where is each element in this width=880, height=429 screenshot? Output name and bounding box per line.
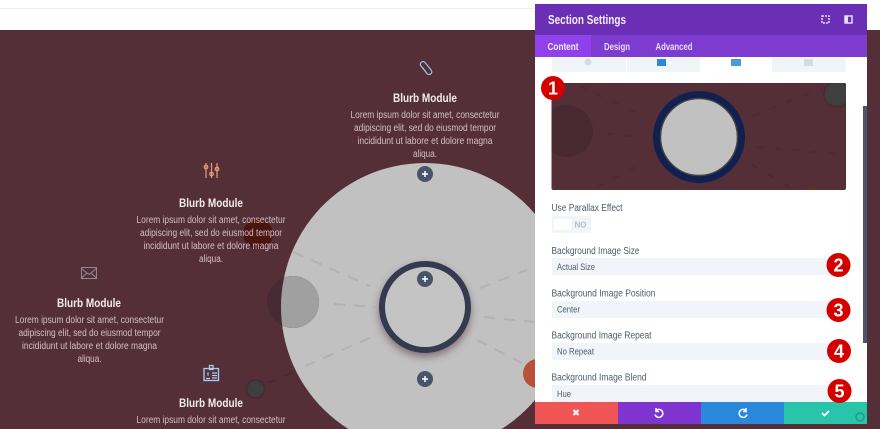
body text: aliqua. (199, 254, 223, 265)
header bar: Section Settings (548, 13, 626, 27)
option: image position (552, 288, 846, 318)
blurb: lower left (136, 366, 286, 426)
body text: adipiscing elit, sed do eiusmod tempor (140, 228, 283, 239)
badge 3: 3 (833, 300, 844, 320)
decorative dot: dark red (243, 219, 273, 249)
option: image size (552, 246, 846, 275)
option: parallax: Use Parallax Effect (552, 203, 623, 214)
body text (136, 215, 286, 265)
body text: incididunt ut labore et dolore magna (144, 241, 279, 252)
tab icon row (552, 57, 846, 72)
option: image size: Actual Size (557, 261, 595, 272)
body text: Lorem ipsum dolor sit amet, consectetur (350, 110, 500, 121)
heading: Blurb Module (179, 196, 243, 210)
badge 5: 5 (834, 382, 845, 402)
icon: envelope (82, 268, 96, 278)
option: image repeat: Background Image Repeat (552, 330, 652, 342)
tab bar: Content (548, 42, 579, 53)
tab bar (535, 35, 867, 57)
heading: Blurb Module (393, 91, 457, 105)
body text: Lorem ipsum dolor sit amet, consectetur (15, 315, 165, 326)
icon: sliders (204, 163, 219, 178)
tab bar: Design (604, 42, 630, 53)
action bar (535, 402, 867, 424)
background preview (552, 83, 846, 190)
header bar (535, 4, 867, 35)
option: image position: Center (557, 304, 580, 314)
badge 2 (826, 253, 850, 277)
badge 4 (827, 339, 851, 363)
side circle (267, 276, 319, 328)
badge 4: 4 (834, 342, 844, 362)
centre ring (379, 264, 471, 357)
settings panel (535, 4, 867, 424)
icon: id badge (204, 366, 218, 380)
option: image position: Background Image Position (552, 288, 656, 300)
badge 3 (826, 298, 850, 322)
badge 5 (828, 379, 852, 403)
option: image blend: Background Image Blend (552, 372, 646, 384)
badge 2: 2 (833, 256, 844, 276)
body text (350, 110, 500, 160)
option: image repeat: No Repeat (557, 346, 594, 356)
large grey circle (281, 163, 569, 429)
decorative dot: charcoal (246, 380, 264, 398)
option: image blend (552, 372, 846, 402)
badge 1: 1 (548, 78, 558, 98)
body text: incididunt ut labore et dolore magna (22, 341, 157, 352)
body text: Lorem ipsum dolor sit amet, consectetur (136, 415, 286, 426)
option: parallax: NO (574, 220, 586, 230)
option: image size: Background Image Size (552, 246, 640, 257)
tab bar: Advanced (656, 42, 692, 53)
body text: adipiscing elit, sed do eiusmod tempor (354, 123, 497, 134)
heading: Blurb Module (57, 296, 121, 310)
add button: centre (417, 271, 433, 287)
heading: Blurb Module (179, 396, 243, 410)
badge 1 (541, 76, 565, 100)
body text (15, 315, 165, 365)
add button: top (417, 166, 433, 182)
option: parallax (552, 203, 623, 233)
body text: incididunt ut labore et dolore magna (358, 136, 493, 147)
scrollbar (863, 106, 867, 343)
option: image repeat (552, 330, 846, 360)
body text: aliqua. (413, 149, 437, 160)
blurb: upper left (136, 163, 286, 265)
add button: bottom (417, 371, 433, 387)
blurb: top (350, 62, 500, 160)
option: image blend: Hue (557, 388, 571, 399)
body text: aliqua. (78, 354, 102, 365)
body text: adipiscing elit, sed do eiusmod tempor (18, 328, 161, 339)
blurb: far left (15, 268, 165, 365)
icon: paperclip (420, 62, 432, 74)
dashed radial lines (268, 252, 535, 383)
body text: Lorem ipsum dolor sit amet, consectetur (136, 215, 286, 226)
orange dot (523, 359, 552, 388)
